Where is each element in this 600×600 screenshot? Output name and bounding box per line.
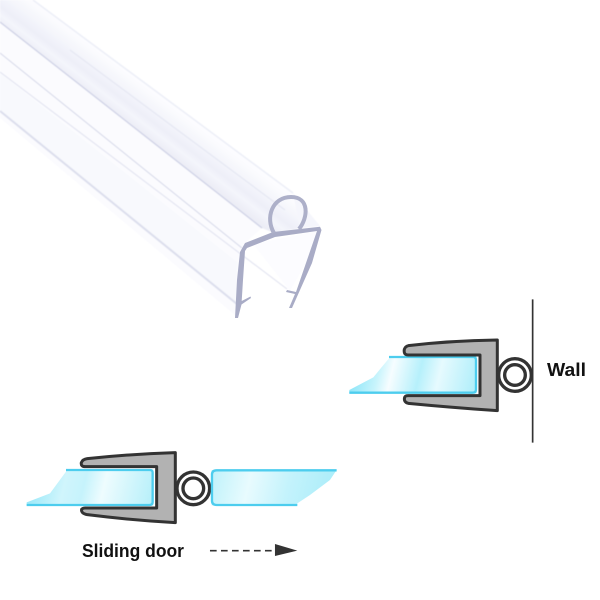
U-channel profile	[81, 453, 175, 523]
seal ring	[499, 359, 531, 391]
arrow: sliding direction	[210, 544, 297, 556]
strip body	[0, 0, 320, 316]
diagram: sliding door	[27, 453, 337, 556]
U-channel profile	[404, 340, 497, 411]
label: Sliding door: Sliding door	[82, 541, 184, 561]
seal ring	[177, 472, 210, 505]
strip cross-section	[235, 197, 322, 318]
seal loop	[270, 197, 306, 233]
label: Wall: Wall	[547, 360, 586, 380]
glass panel	[349, 356, 477, 393]
diagram: glass against wall	[349, 299, 533, 443]
left glass panel	[27, 469, 153, 506]
product photo: transparent seal strip	[0, 0, 322, 318]
right glass panel	[212, 470, 337, 505]
wall line	[530, 299, 535, 443]
